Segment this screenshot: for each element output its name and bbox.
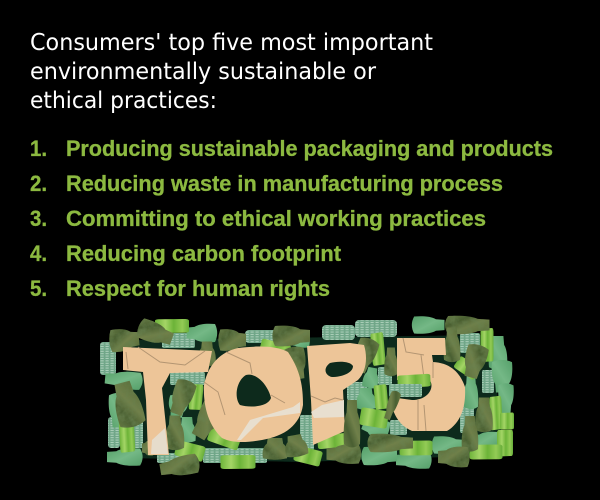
title: Consumers' top five most important <box>30 30 433 56</box>
letter O <box>204 347 303 442</box>
ranked list of five practices: Producing sustainable packaging and products <box>66 136 553 161</box>
letter P <box>307 343 366 445</box>
mid green bottles <box>104 316 514 469</box>
ranked list of five practices: Reducing waste in manufacturing process <box>66 171 503 196</box>
ranked list of five practices: Committing to ethical working practices <box>66 206 486 231</box>
title: environmentally sustainable or <box>30 59 377 85</box>
bright green bottles <box>119 319 514 469</box>
ranked list of five practices <box>30 136 553 301</box>
illustration: TOP 5 cardboard letters on recycled bottles <box>100 316 514 479</box>
title <box>30 30 433 114</box>
dark backing behind bottles <box>125 335 505 462</box>
ranked list of five practices: 5. <box>30 276 47 301</box>
ranked list of five practices: 2. <box>30 171 47 196</box>
ranked list of five practices: Respect for human rights <box>66 276 330 301</box>
ranked list of five practices: 4. <box>30 241 47 266</box>
ranked list of five practices: Reducing carbon footprint <box>66 241 342 266</box>
letter T <box>123 347 212 455</box>
number 5 <box>390 338 465 431</box>
dark olive bottles <box>108 316 493 479</box>
ranked list of five practices: 3. <box>30 206 47 231</box>
ranked list of five practices: 1. <box>30 136 47 161</box>
knitted textile pieces <box>100 320 494 463</box>
title: ethical practices: <box>30 88 217 114</box>
pieces overlapping the 5 <box>344 374 431 448</box>
